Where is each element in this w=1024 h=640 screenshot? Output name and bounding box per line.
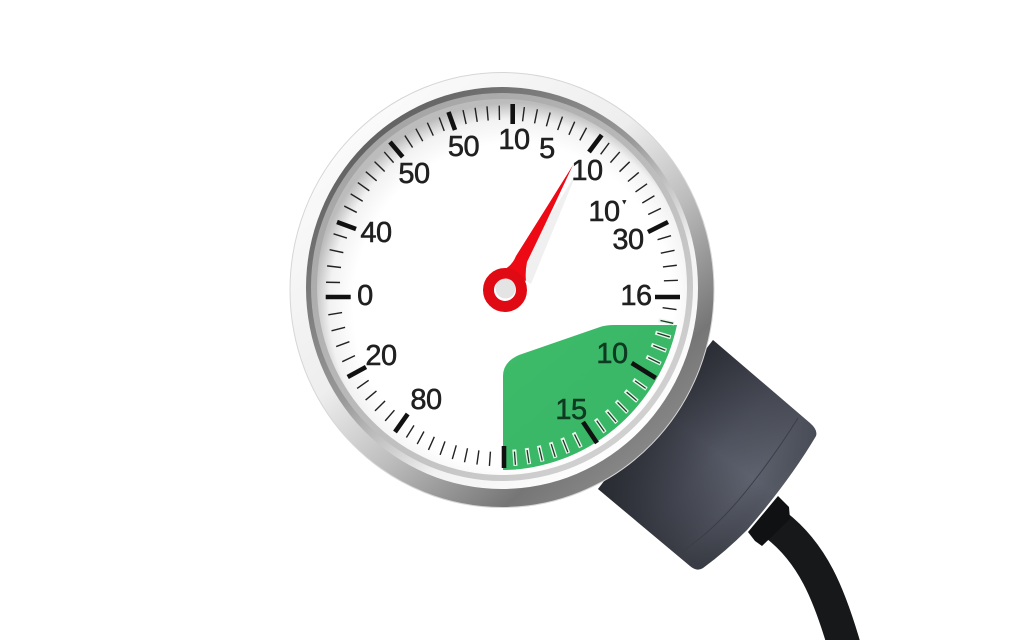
scale numbers: 10 [571, 155, 603, 187]
scale numbers: 16 [620, 280, 652, 312]
needle [488, 165, 577, 306]
scale numbers: 40 [360, 217, 392, 249]
scale numbers: 20 [365, 340, 397, 372]
minor scale ticks [326, 106, 678, 466]
scale numbers: 50 [448, 131, 479, 163]
scale numbers: 80 [410, 384, 442, 416]
scale numbers: 10 [498, 124, 530, 156]
scale numbers: 10 [596, 338, 628, 370]
scale numbers: 15 [555, 394, 587, 426]
scale numbers [357, 124, 652, 426]
scale numbers: 30 [612, 224, 644, 256]
scale numbers: 50 [398, 158, 430, 190]
gauge bezel [290, 72, 714, 508]
major scale ticks [326, 104, 680, 468]
green zone [503, 325, 677, 470]
scale numbers: ▾ [622, 199, 626, 206]
hose cable [748, 496, 846, 640]
green zone ticks [514, 320, 674, 466]
scale numbers: 0 [357, 280, 373, 312]
scale numbers: 5 [539, 133, 555, 165]
gauge housing cylinder [598, 340, 816, 570]
scale numbers: 10 [588, 196, 620, 228]
gauge face [317, 99, 687, 475]
